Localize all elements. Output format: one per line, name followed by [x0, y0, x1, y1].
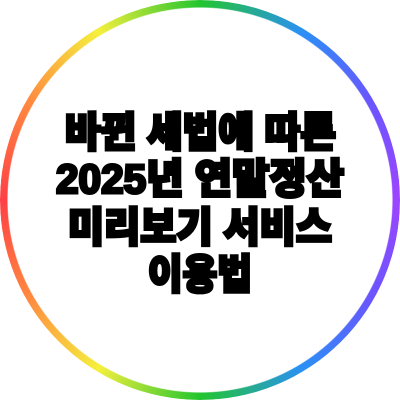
title: 2025년 연말정산: [56, 156, 344, 202]
title: 이용법: [148, 252, 252, 298]
title: 바뀐 세법에 따른: [65, 110, 336, 156]
title: 미리보기 서비스: [68, 204, 332, 250]
